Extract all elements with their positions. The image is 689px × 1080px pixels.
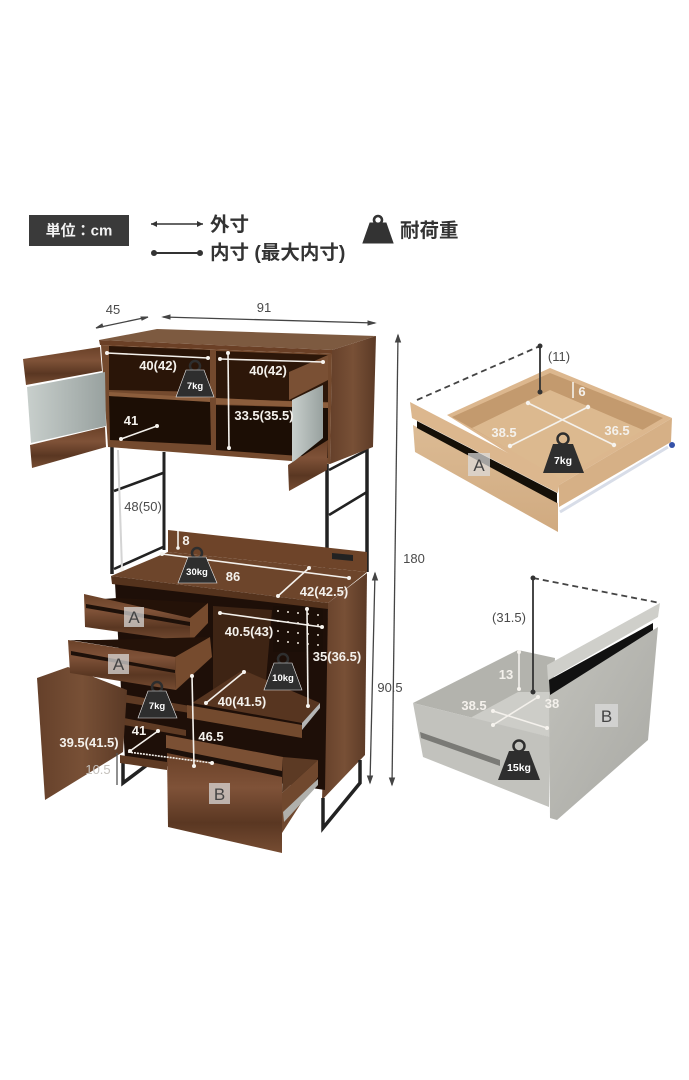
load capacity key (363, 216, 459, 243)
icon: 7kg upper: 7kg (187, 381, 203, 392)
drawer labels: B (601, 707, 612, 726)
inner dimension key: 内寸 (最大内寸) (210, 242, 345, 264)
height 90.5 (368, 573, 403, 783)
drawer A inner dimensions (491, 382, 630, 448)
upper cabinet inner dimensions: 33.5(35.5) (234, 408, 294, 423)
lower cabinet inner dimensions: 8 (182, 533, 190, 548)
lower cabinet inner dimensions: 35(36.5) (313, 649, 361, 664)
drawer labels (108, 453, 618, 804)
drawer A inner dimensions: 36.5 (604, 423, 630, 438)
lower cabinet interior (115, 583, 328, 790)
outer dimension key (151, 214, 249, 236)
outer dimensions (96, 300, 425, 785)
icon: 7kg lower (138, 682, 177, 718)
drawer B (166, 735, 318, 853)
drawer B inner dimensions (461, 650, 559, 730)
right glass door (288, 355, 328, 491)
drawer labels: B (214, 785, 225, 804)
upper cabinet inner dimensions: 41 (124, 413, 138, 428)
lower cabinet inner dimensions: 40(41.5) (218, 694, 266, 709)
upper drawer A (84, 594, 208, 642)
load weight icons (138, 361, 584, 780)
width 91: 91 (257, 300, 271, 315)
icon: 7kg upper (176, 361, 214, 397)
drawer B inner dimensions: 13 (499, 667, 513, 682)
icon: 30kg (178, 548, 217, 583)
drawer B inner dimensions: 38 (545, 696, 559, 711)
lower cabinet inner dimensions: 46.5 (198, 729, 224, 744)
height 180: 180 (403, 551, 425, 566)
drawer labels: A (113, 655, 125, 674)
upper cabinet (99, 329, 376, 464)
drawer A inner dimensions: 6 (578, 384, 586, 399)
icon: 30kg: 30kg (186, 567, 208, 578)
drawer B inner dimensions: 38.5 (461, 698, 487, 713)
cabinet illustration (23, 329, 376, 853)
icon: 7kg drawer A (543, 434, 584, 473)
outer dimension key: 外寸 (210, 214, 249, 236)
lower cabinet inner dimensions: 40.5(43) (225, 624, 273, 639)
unit label (29, 215, 129, 246)
inner dimension key (151, 242, 345, 264)
depth 45: 45 (106, 302, 120, 317)
unit label: 単位：cm (46, 222, 112, 240)
drawer labels: A (473, 456, 485, 475)
interior shelves (120, 694, 190, 770)
icon: 15kg drawer B: 15kg (507, 762, 531, 774)
lower cabinet side (322, 573, 367, 800)
upper cabinet inner dimensions: 40(42) (249, 363, 287, 378)
width 91 (163, 300, 375, 325)
lower drawer A (68, 637, 212, 690)
height marker: (11) (548, 349, 570, 364)
height marker (417, 344, 570, 400)
left lower door (37, 667, 127, 800)
power outlet (332, 553, 353, 561)
counter top (111, 552, 367, 609)
icon: 15kg drawer B (498, 740, 540, 780)
counter back panel (168, 530, 367, 572)
drawer body (447, 368, 672, 485)
drawer A detail (410, 344, 675, 532)
drawer B detail (413, 576, 660, 820)
icon: 10kg (264, 654, 302, 690)
depth 45 (96, 302, 148, 328)
lower cabinet inner dimensions (59, 531, 361, 785)
lower frame legs (123, 758, 360, 828)
lower cabinet inner dimensions: 39.5(41.5) (59, 735, 119, 750)
height 180 (390, 335, 425, 785)
height marker: (31.5) (492, 610, 526, 625)
icon: 10kg: 10kg (272, 673, 294, 684)
lower cabinet inner dimensions: 42(42.5) (300, 584, 348, 599)
lower cabinet inner dimensions: 86 (226, 569, 240, 584)
height marker (492, 576, 660, 694)
upper cabinet inner dimensions: 40(42) (139, 358, 177, 373)
lower cabinet inner dimensions: 10.5 (85, 762, 111, 777)
lower cabinet inner dimensions: 41 (132, 723, 146, 738)
load capacity key: 耐荷重 (400, 219, 459, 242)
left glass door (23, 347, 106, 468)
rail (560, 442, 675, 512)
legend (29, 214, 459, 264)
pull-out shelf (187, 670, 320, 738)
height 90.5: 90.5 (377, 680, 403, 695)
steel frame (112, 446, 367, 582)
upper cabinet inner dimensions (105, 351, 325, 571)
icon: 7kg lower: 7kg (149, 701, 165, 712)
icon: 7kg drawer A: 7kg (554, 455, 572, 467)
drawer A inner dimensions: 38.5 (491, 425, 517, 440)
upper cabinet inner dimensions: 48(50) (124, 499, 162, 514)
perforated board (273, 606, 323, 652)
drawer labels: A (128, 608, 140, 627)
